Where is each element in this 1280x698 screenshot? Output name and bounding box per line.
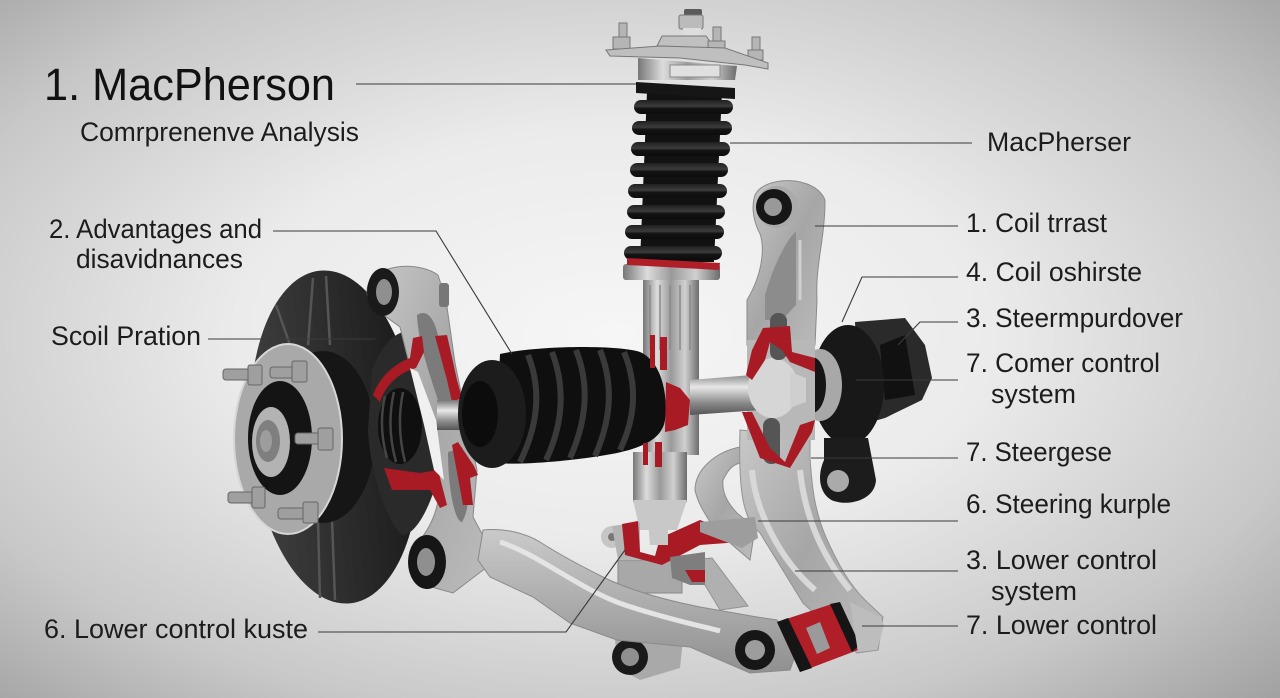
right label: comer control system: 7. Comer control — [966, 348, 1160, 378]
right label: comer control system: system — [991, 379, 1076, 409]
red ball joint cage — [777, 602, 884, 672]
hub flange — [223, 344, 342, 534]
top mount — [606, 9, 768, 99]
arm highlight — [752, 470, 850, 590]
curved rear arm — [695, 447, 755, 560]
right label: lower control system: system — [991, 576, 1077, 606]
right label: lower control system — [966, 545, 1157, 606]
left label: advantages: 2. Advantages and — [49, 214, 262, 244]
right label: lower control system: 3. Lower control — [966, 545, 1157, 575]
tie rod shaft — [690, 372, 790, 415]
left label: advantages: disavidnances — [76, 244, 243, 274]
subtitle: Comrprenenve Analysis — [80, 117, 359, 147]
title: 1. MacPherson — [44, 59, 335, 110]
left label: advantages — [49, 214, 262, 274]
wheel studs — [223, 361, 333, 523]
right label: steergese: 7. Steergese — [966, 437, 1112, 467]
shaft to knuckle — [437, 400, 482, 430]
studs — [613, 23, 763, 60]
strut tube — [633, 275, 699, 530]
ball socket red sections — [742, 313, 815, 468]
left label: lower control kuste: 6. Lower control kuste — [44, 614, 308, 644]
lower arm supports — [618, 560, 682, 593]
rotor — [271, 351, 375, 523]
illustration: MacPherson suspension assembly — [223, 9, 932, 680]
vertical bellows — [624, 92, 733, 262]
knuckle red cutaways — [373, 335, 478, 508]
right label: lower control: 7. Lower control — [966, 610, 1157, 640]
knuckle white section — [410, 368, 444, 480]
brake dust shield — [237, 263, 433, 611]
knuckle — [367, 266, 487, 593]
lower control arm — [478, 530, 797, 673]
right label: coil oshirste: 4. Coil oshirste — [966, 257, 1142, 287]
right label: coil trrast: 1. Coil trrast — [966, 208, 1107, 238]
right label: comer control system — [966, 348, 1160, 409]
red collar — [623, 258, 720, 280]
strut lower bracket — [601, 517, 758, 585]
right black housing — [798, 318, 932, 503]
left label: scoil pration: Scoil Pration — [51, 321, 201, 351]
horizontal bellows — [458, 347, 666, 468]
right label: steering kurple: 6. Steering kurple — [966, 489, 1171, 519]
leader lines — [208, 84, 972, 632]
knuckle centre — [368, 331, 440, 535]
upper right arm — [747, 181, 825, 440]
main right arm — [740, 430, 883, 653]
right label: steermpurdover: 3. Steermpurdover — [966, 303, 1183, 333]
red collar on strut — [643, 335, 690, 467]
right label: macpherser: MacPherser — [987, 127, 1131, 157]
rear bushing — [612, 639, 683, 680]
